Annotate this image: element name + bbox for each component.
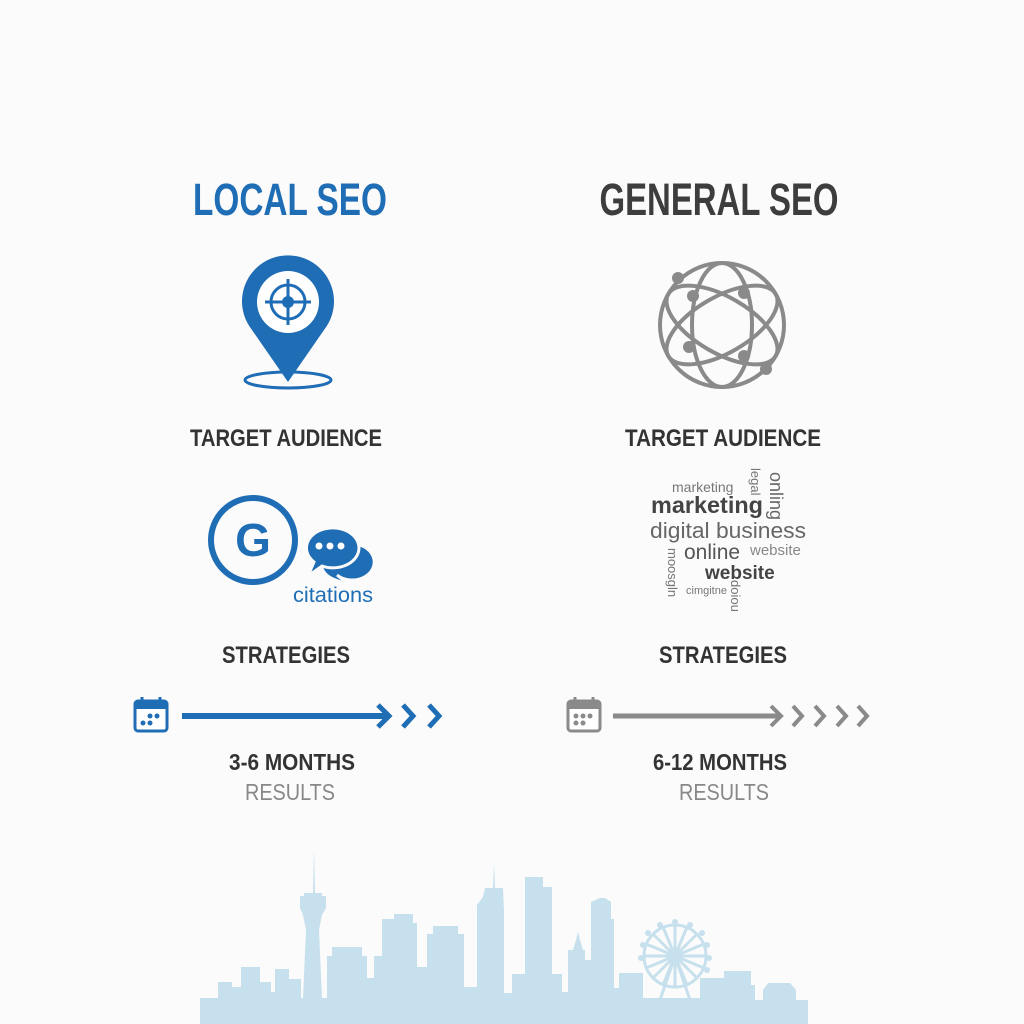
word cloud: marketing xyxy=(651,492,763,518)
timeline: general xyxy=(568,697,867,731)
label: 6-12 months results xyxy=(653,749,787,805)
label: 3-6 months results: RESULTS xyxy=(245,779,335,805)
icon: google and citations: citations xyxy=(293,584,373,607)
label: target audience general: TARGET AUDIENCE xyxy=(625,425,821,452)
word cloud: moosgln xyxy=(665,548,680,597)
timeline: local xyxy=(135,697,439,731)
title: local seo: LOCAL SEO xyxy=(193,174,387,225)
title: general seo: GENERAL SEO xyxy=(600,174,838,225)
label: target audience local: TARGET AUDIENCE xyxy=(190,425,382,452)
word cloud: legal xyxy=(748,468,763,496)
icon: globe network xyxy=(654,263,790,387)
word cloud: website xyxy=(749,542,801,559)
skyline xyxy=(200,849,808,1024)
icon: location pin target xyxy=(242,255,334,388)
label: 3-6 months results: 3-6 MONTHS xyxy=(229,749,355,775)
word cloud: cimgitne xyxy=(686,585,727,597)
word cloud: website xyxy=(704,563,775,584)
label: strategies general: STRATEGIES xyxy=(659,642,787,669)
label: 6-12 months results: 6-12 MONTHS xyxy=(653,749,787,775)
icon: google and citations xyxy=(211,498,374,607)
label: 6-12 months results: RESULTS xyxy=(679,779,769,805)
word cloud: onling xyxy=(766,472,786,520)
word cloud: online xyxy=(684,541,740,564)
label: 3-6 months results xyxy=(229,749,355,805)
word cloud: marketing xyxy=(672,479,733,495)
label: strategies local: STRATEGIES xyxy=(222,642,350,669)
word cloud: digital business xyxy=(650,518,806,543)
icon: google and citations: G xyxy=(235,514,271,566)
word cloud: doiou xyxy=(728,580,743,612)
word cloud xyxy=(650,468,806,612)
